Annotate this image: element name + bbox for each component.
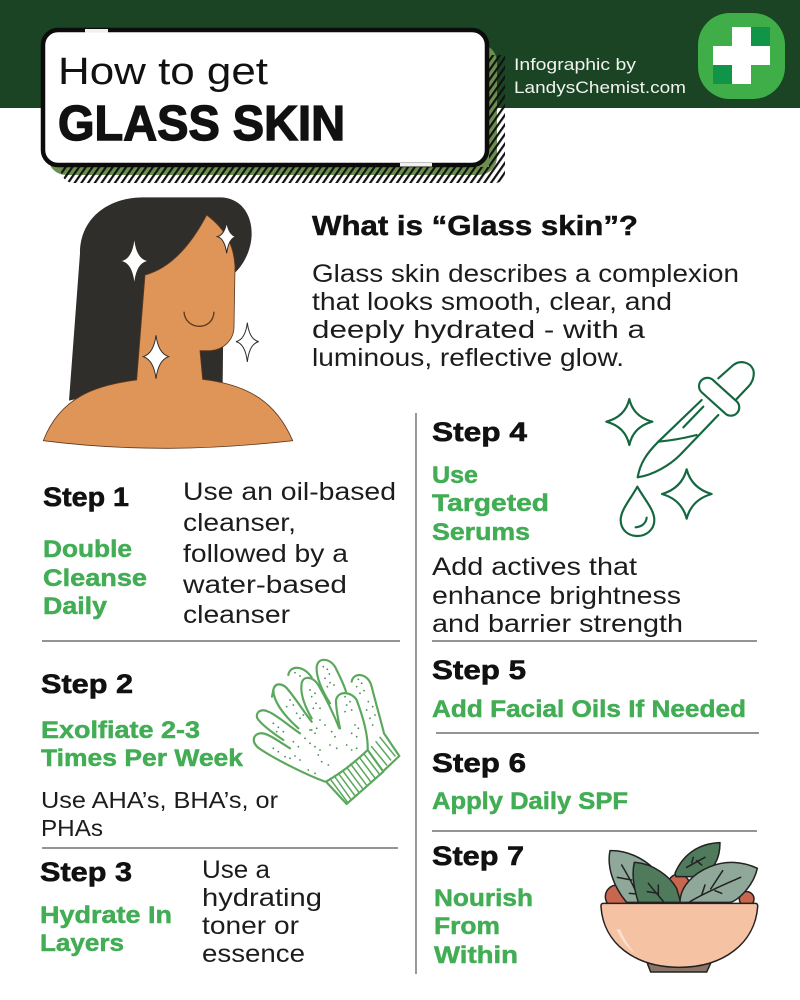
- step 6 title: Apply Daily SPF: [432, 788, 628, 815]
- step 7 title: Nourish: [434, 885, 533, 912]
- icon: exfoliating gloves: [254, 660, 399, 804]
- step 1 title: Daily: [43, 593, 107, 620]
- section: what is glass skin: [312, 210, 739, 372]
- credit text: Infographic by: [514, 56, 637, 74]
- step 4 text: enhance brightness: [432, 582, 681, 610]
- step 2 text: PHAs: [41, 815, 103, 841]
- step 2 label: Step 2: [41, 669, 133, 699]
- step 3 title: Layers: [40, 930, 124, 957]
- description: Glass skin describes a complexion: [312, 260, 739, 288]
- step 5 label: Step 5: [432, 655, 526, 685]
- step 7 title: From: [434, 913, 500, 940]
- step 1 text: water-based: [182, 571, 347, 599]
- icon: salad bowl: [601, 843, 758, 972]
- step 1 title: Double: [43, 536, 132, 563]
- panel: step 7: [432, 841, 758, 972]
- step 1 text: cleanser,: [183, 509, 296, 537]
- header band: [0, 0, 800, 108]
- step 2 title: Times Per Week: [41, 745, 243, 772]
- step 1 title: Cleanse: [43, 565, 147, 592]
- step 3 text: essence: [202, 940, 305, 968]
- description: luminous, reflective glow.: [312, 344, 624, 372]
- illustration: woman with glowing skin: [43, 197, 293, 448]
- step 7 title: Within: [434, 942, 518, 969]
- step 4 title: [432, 462, 549, 546]
- icon: pharmacy cross logo: [698, 13, 785, 99]
- description: [312, 260, 739, 372]
- panel: step 6: [432, 748, 628, 815]
- panel: step 5: [432, 655, 746, 723]
- step 2 title: [41, 717, 243, 772]
- credit text: [514, 56, 686, 97]
- step 3 text: hydrating: [202, 884, 322, 912]
- step 2 text: [41, 787, 278, 841]
- step 3 text: Use a: [202, 856, 270, 884]
- heading: What is “Glass skin”?: [312, 210, 638, 241]
- title card: [43, 29, 505, 183]
- step 3 title: Hydrate In: [40, 902, 172, 929]
- step 2 text: Use AHA’s, BHA’s, or: [41, 787, 278, 813]
- panel: step 4: [432, 362, 754, 638]
- step 4 label: Step 4: [432, 417, 527, 447]
- panel: step 3: [40, 856, 322, 968]
- step 4 text: [432, 553, 683, 638]
- credit text: LandysChemist.com: [514, 79, 686, 97]
- step 4 title: Use: [432, 462, 478, 489]
- step 7 label: Step 7: [432, 841, 524, 871]
- panel: step 1: [43, 478, 396, 629]
- description: that looks smooth, clear, and: [312, 288, 672, 316]
- step 1 label: Step 1: [43, 482, 129, 512]
- step 4 title: Serums: [432, 519, 530, 546]
- step 1 text: Use an oil-based: [183, 478, 396, 506]
- step 3 text: [202, 856, 322, 968]
- step 1 title: [43, 536, 147, 620]
- step 7 title: [434, 885, 533, 969]
- step 3 text: toner or: [202, 912, 299, 940]
- step 4 title: Targeted: [432, 490, 549, 517]
- step 3 label: Step 3: [40, 857, 132, 887]
- step 2 title: Exolfiate 2-3: [41, 717, 200, 744]
- step 4 text: Add actives that: [432, 553, 637, 581]
- description: deeply hydrated - with a: [312, 316, 645, 344]
- step 1 text: followed by a: [183, 540, 348, 568]
- icon: serum dropper: [606, 362, 754, 536]
- title line 2: GLASS SKIN: [58, 97, 345, 151]
- title line 1: How to get: [58, 51, 269, 93]
- step 1 text: [182, 478, 396, 629]
- step 1 text: cleanser: [183, 601, 290, 629]
- step 3 title: [40, 902, 172, 957]
- step 6 label: Step 6: [432, 748, 526, 778]
- step 4 text: and barrier strength: [432, 610, 683, 638]
- panel: step 2: [41, 660, 399, 841]
- step 5 title: Add Facial Oils If Needed: [432, 696, 746, 723]
